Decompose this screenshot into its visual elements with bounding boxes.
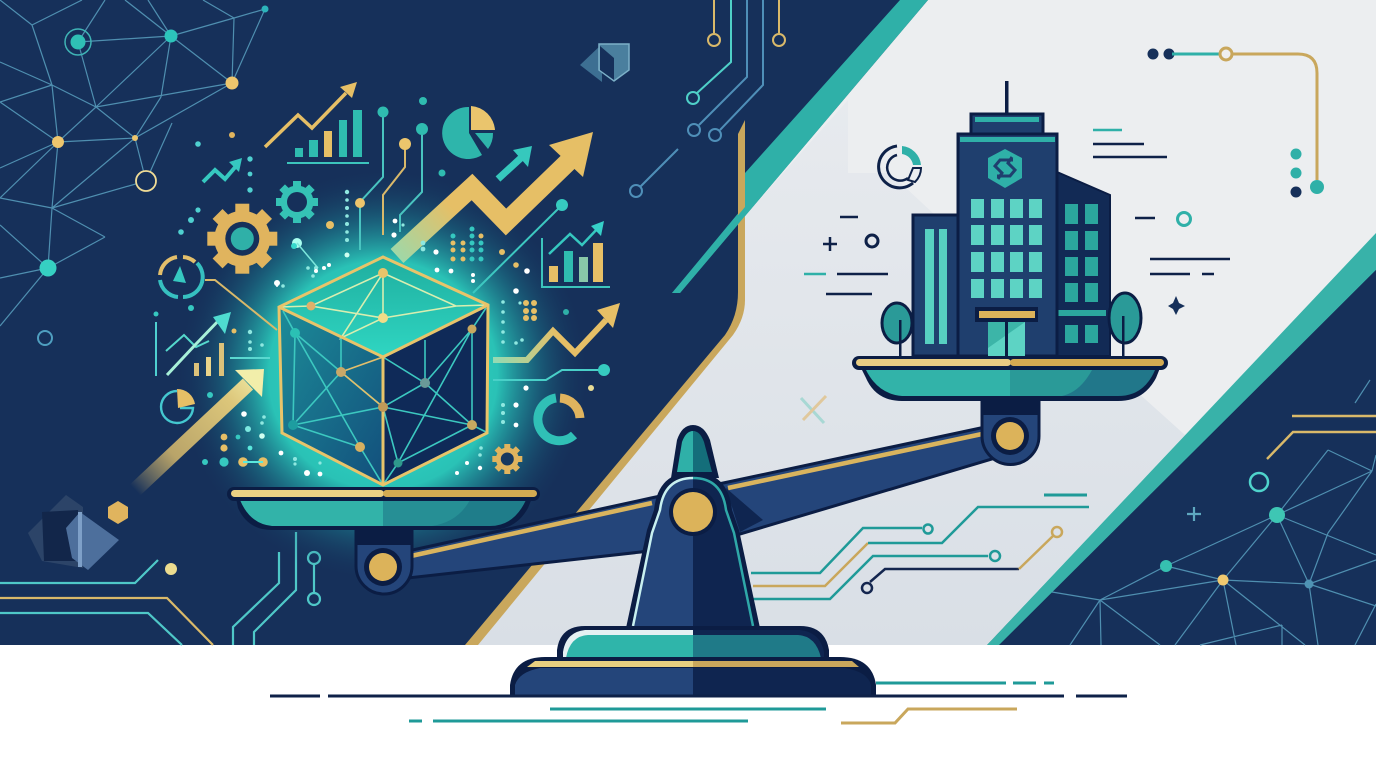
cube: inner wire network [279,273,488,485]
cube: outline [279,257,488,485]
tree: right [1109,293,1141,357]
gold curved divider [465,120,745,645]
decorative marks: left of building [804,217,888,294]
building: right wing [1057,172,1110,356]
scale: top tip [671,425,719,478]
arrow: lower-left gold [135,369,264,490]
diagonal teal stripe top [672,0,928,293]
scale: upper base [557,626,829,660]
icon: shield [580,44,629,82]
chart: small pie lower-left [161,389,195,423]
icon: hexagon [108,501,128,524]
diagonal teal stripe overlay on gold [672,207,745,293]
scale: left hanger [356,528,412,594]
arrow: big gold trend [397,132,593,256]
scale: left pan [227,487,540,530]
network: top left [0,0,265,326]
data dots around cube [154,190,439,476]
background: navy corner bottom right [999,270,1376,646]
icon: faded cube [28,495,119,570]
icon: faded cross [801,396,826,423]
icon: sparkle [1168,296,1185,315]
dot: gold [165,563,177,575]
building: tower windows [971,199,1042,298]
icon: gauge ring [160,257,203,297]
chart: mini lower-left [155,312,270,376]
chart: bars with gold trend arrow [265,82,369,164]
network nodes: bottom right [1160,473,1314,588]
network nodes: top left [38,6,268,345]
circuit traces: above cube [205,112,604,380]
floor lines [270,683,1127,723]
building: main tower [958,134,1057,356]
scale: pivot post [626,472,760,628]
circuit nodes [292,97,610,376]
circuit traces: top centre [630,0,785,197]
cube: faces [279,257,488,485]
chart: donut lower-right [538,398,580,441]
connector: top right gold circuit [1148,48,1324,198]
icon: small gold gear [492,444,522,474]
arrow: small teal [498,146,532,179]
dot matrix: small bars [435,226,594,475]
scale: beam [408,427,992,578]
icon: gold gear [207,204,277,274]
icon: teal gear [276,181,318,223]
white floor [0,645,1376,768]
ring: teal right of building [1178,212,1190,226]
building: entrance [975,307,1038,356]
chart: pie top [442,106,495,159]
glow behind cube [175,167,591,583]
icon: zigzag teal arrow [203,158,242,182]
circuit traces: lower right of scale [751,495,1089,599]
decorative lines: right of building [1093,130,1230,274]
scale: right pan [852,356,1168,401]
diagonal teal stripe bottom right [987,233,1376,645]
building: antenna and roof [971,81,1043,134]
cube: nodes [288,268,477,468]
arrow: right gold trend [493,303,620,360]
scale: pivot bolt [669,488,717,536]
tree: left [882,303,912,357]
scale: right hanger [982,398,1039,464]
building: hexagon logo [988,149,1022,188]
dotted column left of zigzag [178,132,253,235]
circuit traces: bottom left [0,532,320,645]
gold lines: right edge [1267,416,1376,459]
icon: ring chart right panel [879,146,921,188]
background: light panel [470,0,1376,645]
chart: right bar chart [542,221,610,287]
building: left wing [913,215,959,356]
network: bottom right [1052,380,1376,645]
scale: lower base [510,657,876,697]
